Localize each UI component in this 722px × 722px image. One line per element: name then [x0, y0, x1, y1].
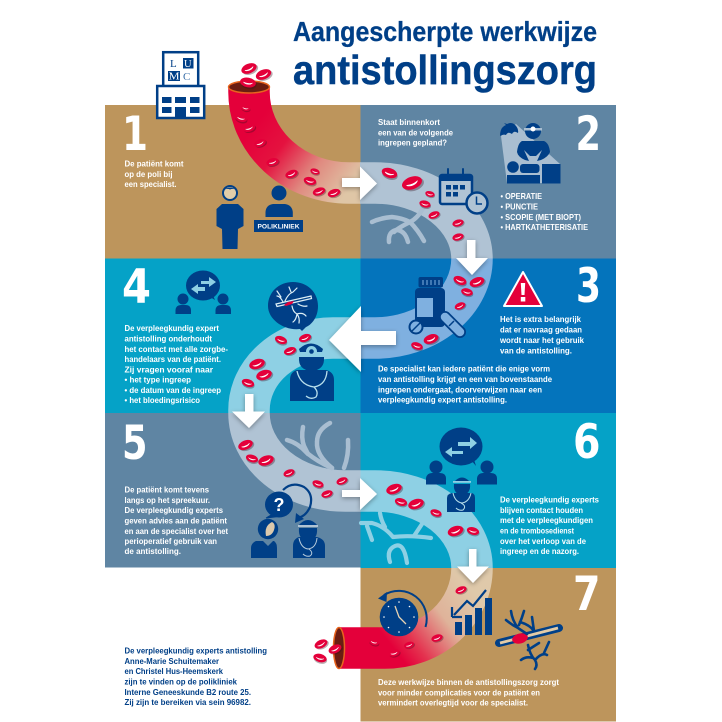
icon: bar chart with trend arrow: [452, 590, 492, 635]
panel 2: planned procedures: [360, 105, 616, 259]
text: step 5: de antistolling.: [124, 546, 181, 556]
icon: LUMC building: C: [183, 71, 190, 83]
red blood cells: [237, 438, 350, 500]
blood vessel: [249, 413, 360, 491]
arrow: step 5 to 6: [342, 478, 377, 510]
list of procedures: • HARTKATHETERISATIE: [500, 222, 588, 232]
text: step 7: [378, 677, 559, 708]
text: contact details: De verpleegkundig experts antistolling: [124, 646, 267, 656]
text: step 5: langs op het spreekuur.: [124, 495, 210, 505]
icon: clinic desk with staff: POLIKLINIEK: [258, 224, 300, 230]
arrow: step 1 to 2: [342, 166, 377, 200]
icon: calendar and clock: [440, 169, 488, 214]
text: contact details: zijn te vinden op de polikliniek: [124, 676, 237, 686]
blood vessel: [249, 338, 360, 413]
blood vessel start: [228, 81, 360, 183]
icon: doctor with stethoscope: [290, 344, 334, 401]
text: step 4: [124, 323, 228, 405]
text: extra important: [499, 314, 584, 356]
icon: LUMC building: M: [169, 72, 180, 82]
text: step 1: op de poli bij: [124, 169, 172, 179]
text: step 1: [124, 158, 184, 189]
capillaries: [287, 423, 348, 468]
text: step 5: perioperatief gebruik van: [124, 536, 217, 546]
text: step 5: geven advies aan de patiënt: [124, 516, 227, 526]
text: contact details: [124, 646, 267, 707]
text: step 6: [500, 494, 599, 556]
text: extra important: dat er navraag gedaan: [500, 324, 582, 334]
red blood cells: [410, 274, 487, 353]
panel 7: result: [312, 567, 616, 722]
text: step 1: De patiënt komt: [124, 158, 184, 168]
red blood cells: [385, 481, 481, 540]
red blood cells: [234, 61, 342, 200]
text: step 4: antistolling onderhoudt: [124, 334, 212, 344]
icon: warning triangle: [504, 272, 542, 306]
capillaries: [372, 208, 424, 242]
text: step 6: en de trombosedienst: [500, 526, 574, 536]
text: contact details: Zij zijn te bereiken via sein 96982.: [124, 697, 251, 707]
panel 6: nurses stay in contact: [360, 413, 616, 568]
text: extra important: wordt naar het gebruik: [499, 335, 584, 345]
list of procedures: • OPERATIE: [500, 191, 542, 201]
text: step 4: • het type ingreep: [124, 374, 191, 384]
red blood cells: [240, 332, 313, 390]
arrow: step 3 to 4: [329, 306, 396, 372]
text: contact details: Anne-Marie Schuitemaker: [124, 656, 220, 666]
text: step 6: blijven contact houden: [500, 505, 583, 515]
icon: question bubble with patient and doctor: [251, 485, 325, 558]
text: step 5: De patiënt komt tevens: [124, 484, 209, 494]
icon: LUMC building: L: [170, 58, 177, 70]
number 4: 4: [122, 260, 151, 315]
text: step 7: voor minder complicaties voor de patiënt en: [378, 688, 540, 698]
text: referral: De specialist kan iedere patiënt die enige vorm: [378, 364, 550, 374]
arrow: step 4 to 5: [232, 394, 265, 428]
text: step 4: handelaars van de patiënt.: [124, 354, 221, 364]
icon: patient: [216, 186, 244, 249]
number 6: 6: [573, 415, 600, 470]
text: referral: verpleegkundig expert antistolling.: [378, 394, 507, 404]
text: contact details: en Christel Hus-Heemskerk: [124, 666, 223, 676]
text: extra important: Het is extra belangrijk: [500, 314, 581, 324]
text: step 6: over het verloop van de: [500, 536, 586, 546]
text: step 7: vermindert overlegtijd voor de specialist.: [378, 698, 528, 708]
icon: clock with return arrow: [378, 591, 427, 636]
list of procedures: [500, 191, 588, 232]
list of procedures: • PUNCTIE: [500, 202, 538, 212]
number 5: 5: [122, 416, 148, 471]
text: referral: ingrepen ondergaat, doorverwijzen naar een: [378, 384, 542, 394]
text: step 1: een specialist.: [124, 179, 176, 189]
number 1: 1: [122, 107, 148, 162]
title: Aangescherpte werkwijze: [293, 16, 597, 47]
text: step 7: Deze werkwijze binnen de antistollingszorg zorgt: [378, 677, 559, 687]
text: referral: [378, 364, 552, 404]
blood vessel: [360, 258, 472, 338]
panel 5: advice at consultation: [105, 413, 360, 568]
title: [293, 16, 597, 93]
icon: medication bottle and pills: [410, 277, 460, 334]
icon: clinic desk with staff: [254, 186, 303, 232]
text: step 4: het contact met alle zorgbe-: [124, 344, 228, 354]
number 3: 3: [576, 259, 601, 314]
icon: speech bubble with blood vessel: [268, 282, 318, 331]
text: step 4: De verpleegkundig expert: [124, 323, 219, 333]
number 2: 2: [576, 107, 601, 162]
panel 4: nurse expert keeps contact: [105, 258, 360, 413]
icon: blood vessel with clot: [499, 611, 559, 669]
number 7: 7: [573, 567, 600, 622]
icon: surgeon and patient: [500, 123, 560, 184]
icon: two people talking: [176, 270, 231, 314]
text: step 6: met de verpleegkundigen: [500, 515, 593, 525]
icon: question bubble with patient and doctor: ?: [274, 495, 284, 515]
icon: team with doctor talking: [426, 428, 497, 512]
red blood cells: [312, 585, 469, 665]
text: question: [378, 117, 453, 148]
icon: LUMC building: U: [184, 59, 192, 70]
blood vessel: [360, 183, 472, 259]
arrow: step 2 to 3: [456, 240, 488, 275]
text: step 4: • het bloedingsrisico: [124, 395, 200, 405]
text: question: Staat binnenkort: [378, 117, 440, 127]
text: step 5: [124, 484, 228, 556]
capillaries: [361, 513, 431, 563]
text: step 6: ingreep en de nazorg.: [500, 546, 579, 556]
text: step 4: Zij vragen vooraf naar: [124, 364, 214, 374]
text: step 6: De verpleegkundig experts: [500, 494, 599, 504]
title: antistollingszorg: [293, 47, 597, 93]
text: step 5: en aan de specialist over het: [124, 526, 228, 536]
text: step 5: De verpleegkundig experts: [124, 505, 223, 515]
text: extra important: van de antistolling.: [500, 346, 572, 356]
text: referral: van antistolling krijgt en een van bovenstaande: [378, 374, 552, 384]
blood vessel end: [334, 568, 472, 668]
text: question: een van de volgende: [378, 128, 453, 138]
panel 3: ask about anticoagulants: [360, 258, 616, 413]
arrow: step 6 to 7: [457, 549, 489, 583]
panel 1: patient at the clinic: [105, 52, 360, 259]
text: step 4: • de datum van de ingreep: [124, 385, 221, 395]
list of procedures: • SCOPIE (MET BIOPT): [500, 212, 581, 222]
text: question: ingrepen gepland?: [378, 138, 447, 148]
icon: LUMC building: [157, 52, 204, 118]
red blood cells: [380, 166, 465, 243]
text: contact details: Interne Geneeskunde B2 route 25.: [124, 687, 251, 697]
blood vessel: [360, 491, 472, 568]
